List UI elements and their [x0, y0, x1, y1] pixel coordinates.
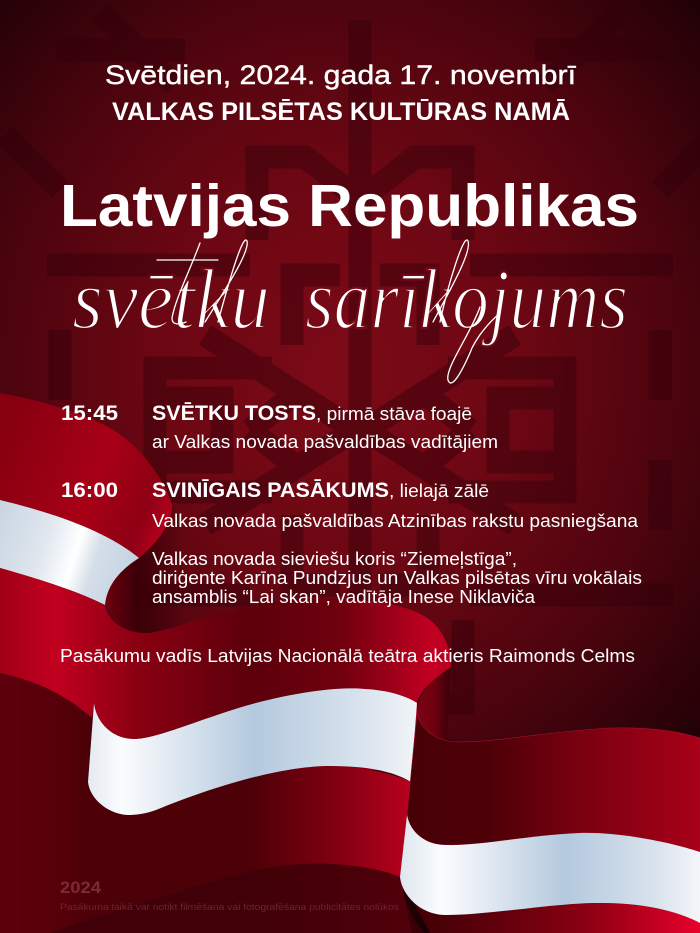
- subtitle flourishes: [157, 240, 500, 383]
- venue line: VALKAS PILSĒTAS KULTŪRAS NAMĀ: [112, 98, 570, 126]
- host line: Pasākumu vadīs Latvijas Nacionālā teātra aktieris Raimonds Celms: [60, 646, 635, 666]
- flag ribbon: [0, 393, 700, 933]
- flag: right red band: [407, 713, 700, 852]
- footer year: 2024: [60, 878, 102, 897]
- heading: ceremony: SVINĪGAIS PASĀKUMS: [152, 479, 389, 502]
- flag: centre white band: [88, 688, 417, 815]
- flag: top fold: [417, 667, 460, 742]
- flag: lower dark wave: [50, 864, 425, 933]
- time 15:45: 15:45: [61, 402, 118, 425]
- flag: right white band: [400, 815, 700, 923]
- ceremony award: Valkas novada pašvaldības Atzinības rakstu pasniegšana: [152, 511, 639, 531]
- script subtitle: sarīkojums: [305, 251, 628, 347]
- flag: left fold shadow: [105, 505, 190, 640]
- flag: lower red band: [85, 766, 412, 933]
- ceremony location: , lielajā zālē: [389, 481, 489, 501]
- date line: Svētdien, 2024. gada 17. novembrī: [105, 60, 577, 90]
- performers: diriģente Karīna Pundzjus un Valkas pilsētas vīru vokālais: [152, 568, 642, 588]
- heading: toast: SVĒTKU TOSTS: [152, 402, 316, 425]
- toast detail: ar Valkas novada pašvaldības vadītājiem: [152, 432, 498, 452]
- flag: main red band: [0, 568, 451, 770]
- flag: upper left white band: [0, 500, 139, 605]
- schedule: 16:00: [61, 479, 642, 607]
- flag: lower right red band: [415, 903, 700, 933]
- performers: [152, 549, 642, 607]
- time 16:00: 16:00: [61, 479, 118, 502]
- performers: ansamblis “Lai skan”, vadītāja Inese Niklaviča: [152, 587, 536, 607]
- flag: left dark panel: [0, 673, 120, 933]
- flag: upper left red band: [0, 393, 172, 558]
- script subtitle: [72, 240, 628, 383]
- footer note: Pasākuma laikā var notikt filmēšana vai fotografēšana publicitātes nolūkos: [60, 902, 400, 912]
- script subtitle: svētku: [72, 251, 270, 347]
- toast location: , pirmā stāva foajē: [316, 404, 472, 424]
- performers: Valkas novada sieviešu koris “Ziemeļstīga”,: [152, 549, 517, 569]
- main title: Latvijas Republikas: [60, 173, 639, 239]
- schedule: 15:45: [61, 402, 498, 452]
